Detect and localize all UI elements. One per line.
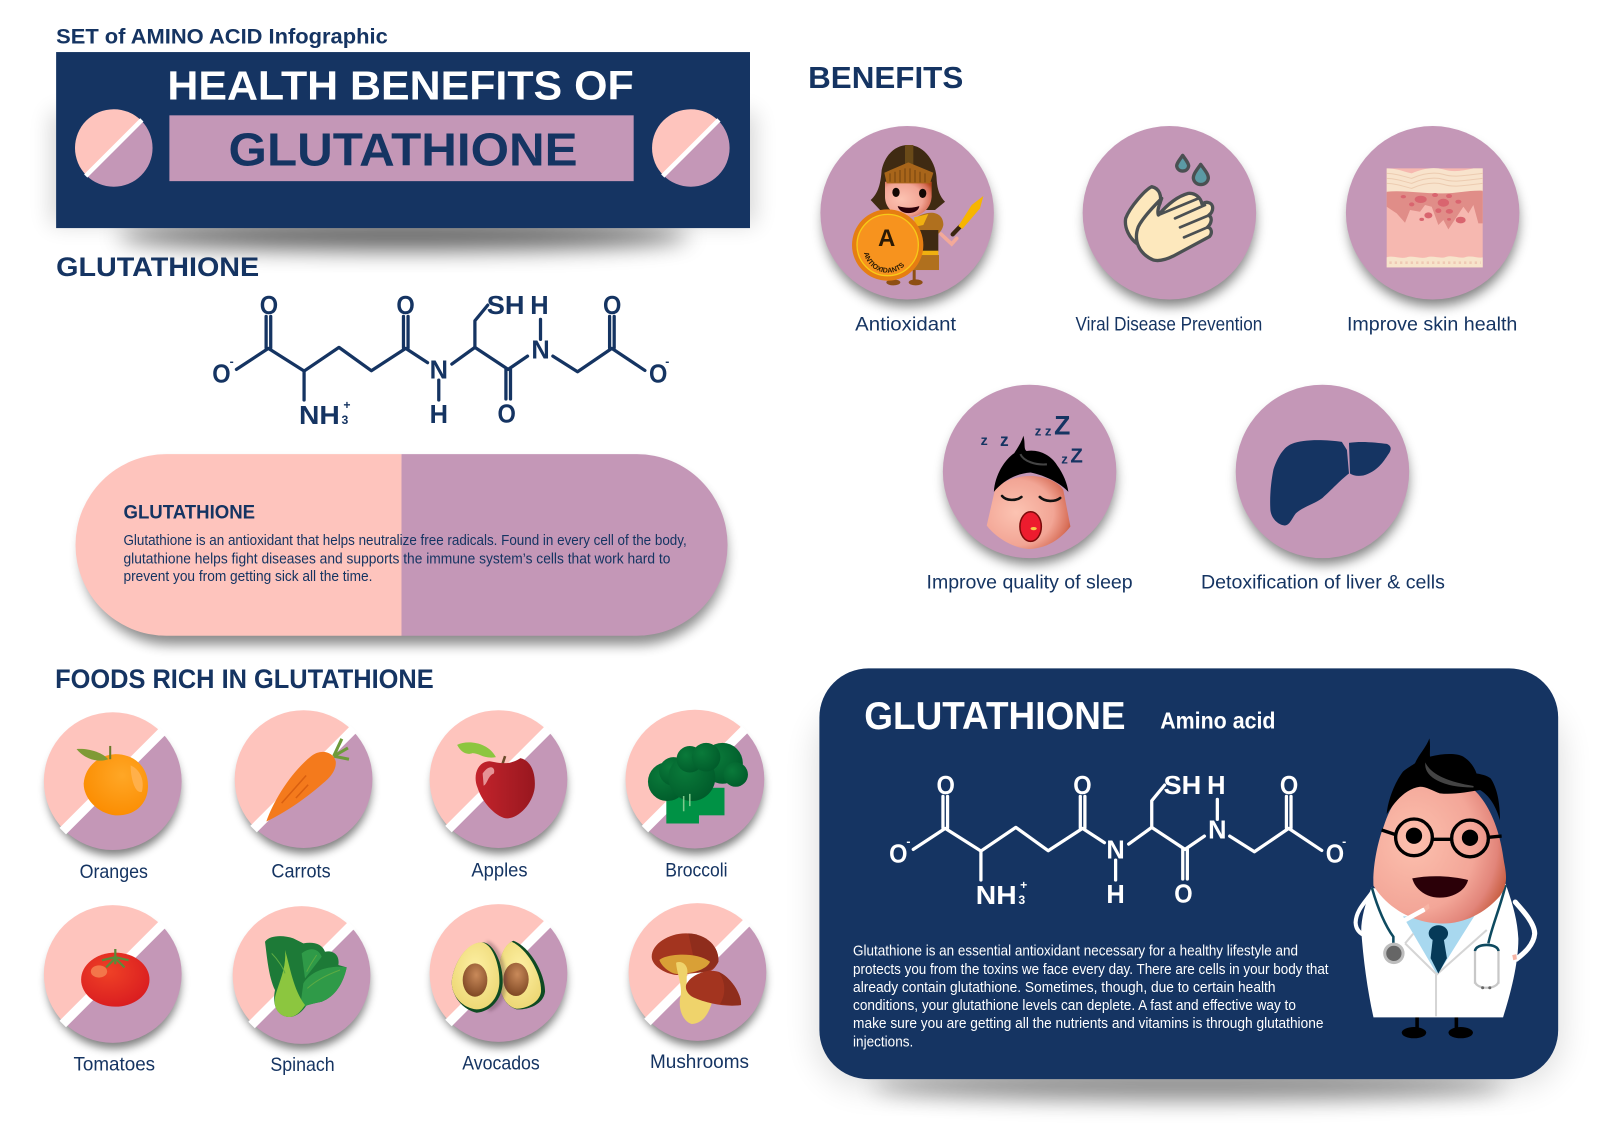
panel body text: injections. (853, 1034, 913, 1050)
benefit: antioxidant (815, 126, 1002, 336)
icon: left pill (75, 109, 153, 187)
food: apples: Apples (471, 860, 528, 882)
panel body text: already contain glutathione. Sometimes, though, due to certain health (853, 980, 1276, 996)
panel body text: protects you from the toxins we face every day. There are cells in your body that (853, 962, 1329, 978)
heading: health benefits of: HEALTH BENEFITS OF (167, 63, 634, 109)
icon: washing hands (1125, 155, 1213, 261)
food: spinach (233, 906, 370, 1076)
food: avocados (430, 904, 567, 1074)
icon: sleeping head: z (1045, 424, 1052, 439)
food: tomatoes: Tomatoes (73, 1053, 155, 1075)
capsule heading: GLUTATHIONE (123, 501, 255, 523)
chemical structure: white: - (906, 834, 911, 848)
food: broccoli (626, 710, 764, 882)
food: apples (430, 710, 567, 882)
chemical structure: white: N (1106, 837, 1125, 865)
capsule body text: Glutathione is an antioxidant that helps neutralize free radicals. Found in every cell of the body, (123, 533, 687, 549)
panel body text: make sure you are getting all the nutrients and vitamins is through glutathione (853, 1016, 1323, 1032)
icon: sleeping head: z (1000, 430, 1009, 450)
chemical structure: white: + (1020, 878, 1027, 892)
title plate (169, 115, 634, 181)
icon: doctor character (1356, 738, 1535, 1038)
chemical structure: white: O (1326, 841, 1344, 869)
capsule body text: glutathione helps fight diseases and supports the immune system’s cells that work hard to (123, 551, 670, 567)
panel body text: conditions, your glutathione levels can deplete. A fast and effective way to (853, 998, 1296, 1014)
icon: right pill (652, 109, 730, 187)
food: mushrooms: Mushrooms (650, 1051, 749, 1073)
chemical structure: navy: O (212, 361, 231, 389)
benefit: antioxidant: Antioxidant (855, 314, 957, 336)
chemical structure: white: N (1208, 817, 1227, 845)
chemical structure: white: H (1207, 772, 1226, 800)
benefit: improve skin health (1346, 126, 1519, 336)
chemical structure: navy (212, 292, 669, 430)
chemical structure: navy: H (430, 401, 448, 429)
chemical structure: white: O (937, 772, 955, 800)
header banner (51, 52, 755, 250)
chemical structure: navy: O (497, 400, 516, 428)
chemical structure: navy: H (530, 292, 549, 320)
chemical structure: navy: O (260, 292, 278, 320)
icon: antioxidant warrior: A (878, 225, 895, 252)
panel: glutathione capsule (76, 454, 728, 645)
benefit: detoxification of liver and cells (1201, 385, 1445, 593)
icon: sleeping head: z (1035, 424, 1042, 439)
chemical structure: navy: NH (299, 402, 340, 430)
chemical structure: navy: O (396, 292, 415, 320)
chemical structure: white: SH (1164, 772, 1201, 800)
chemical structure: white: 3 (1018, 893, 1025, 907)
section heading: foods: FOODS RICH IN GLUTATHIONE (55, 664, 434, 694)
icon: skin cross-section (1387, 168, 1483, 267)
section heading: benefits: BENEFITS (808, 61, 963, 95)
icon: sleeping head: Z (1054, 411, 1070, 441)
food: oranges (44, 712, 182, 883)
section heading: glutathione: GLUTATHIONE (56, 252, 259, 282)
food: carrots: Carrots (271, 861, 331, 883)
kicker title: SET of AMINO ACID Infographic (56, 24, 388, 48)
food: tomatoes (44, 905, 182, 1075)
icon: liver (1270, 440, 1391, 526)
panel body text: Glutathione is an essential antioxidant necessary for a healthy lifestyle and (853, 944, 1298, 960)
chemical structure: navy: O (649, 361, 667, 389)
food: mushrooms (629, 903, 766, 1073)
chemical structure: navy: 3 (341, 413, 348, 427)
chemical structure: white: O (1280, 772, 1298, 800)
food: carrots (235, 710, 372, 883)
chemical structure: white: - (1342, 834, 1346, 848)
chemical structure: navy: O (603, 292, 621, 320)
chemical structure: navy: SH (487, 292, 524, 320)
icon: sleeping head: z (1061, 451, 1068, 466)
chemical structure: navy: N (531, 337, 550, 365)
panel heading: GLUTATHIONE (864, 695, 1126, 738)
food: avocados: Avocados (462, 1052, 540, 1074)
icon: sleeping head (981, 411, 1083, 549)
benefit: viral disease prevention: Viral Disease Prevention (1076, 314, 1262, 336)
chemical structure: white: NH (976, 882, 1017, 910)
benefit: improve skin health: Improve skin health (1347, 314, 1517, 336)
chemical structure: navy: - (230, 354, 234, 368)
icon: sleeping head: z (981, 433, 988, 449)
chemical structure: navy: + (343, 398, 351, 412)
capsule body text: prevent you from getting sick all the time. (123, 569, 372, 585)
chemical structure: white: O (889, 841, 907, 869)
benefit: viral disease prevention (1076, 126, 1262, 336)
panel body text (853, 944, 1329, 1050)
chemical structure: white: H (1106, 881, 1125, 909)
food: oranges: Oranges (80, 861, 148, 883)
benefit: improve quality of sleep (927, 385, 1133, 593)
panel subheading: Amino acid (1160, 708, 1276, 734)
icon: sleeping head: Z (1070, 445, 1083, 467)
capsule body text (123, 533, 687, 585)
chemical structure: white (889, 772, 1346, 910)
title plate: GLUTATHIONE (229, 123, 578, 175)
chemical structure: white: O (1174, 880, 1193, 908)
icon: antioxidant warrior (852, 145, 984, 286)
icon: antioxidant warrior: ANTIOXIDANTS (864, 252, 904, 273)
benefit: improve quality of sleep: Improve quality of sleep (927, 571, 1133, 593)
chemical structure: navy: N (430, 357, 448, 385)
benefit: detoxification of liver and cells: Detoxification of liver & cells (1201, 571, 1445, 593)
panel: glutathione amino acid (816, 668, 1561, 1100)
chemical structure: white: O (1073, 772, 1092, 800)
chemical structure: navy: - (665, 354, 669, 368)
food: spinach: Spinach (270, 1054, 335, 1076)
food: broccoli: Broccoli (665, 860, 728, 882)
